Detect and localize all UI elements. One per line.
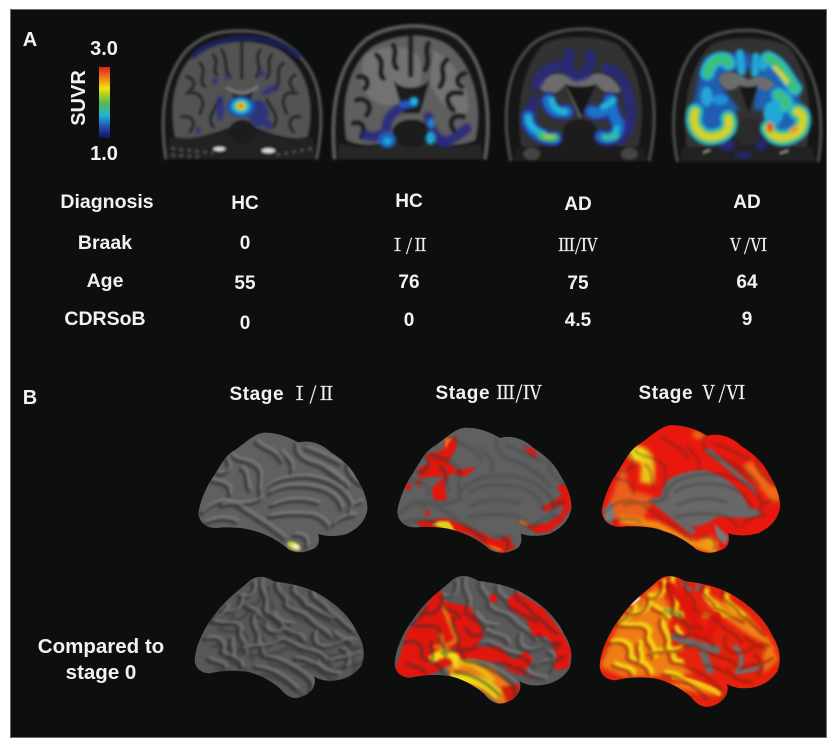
colour scale: SUVR: 1.0 [90,143,118,165]
table row labels: Diagnosis [60,191,154,213]
table column: scan 3 values: 75 [567,273,589,294]
table column: scan 1 values: 55 [234,273,256,294]
table column: scan 2 values: HC [395,191,423,212]
table column: scan 3 values [558,194,598,331]
brain: stage I/II lateral [195,577,365,702]
table column: scan 1 values: 0 [240,313,250,334]
table column: scan 1 values [231,193,259,334]
table column: scan 2 values [389,191,429,331]
PET scan 4: AD Braak V/VI [673,30,821,162]
row label: compared to stage 0 [38,635,164,684]
table row labels: CDRSoB [64,308,146,330]
row label: compared to stage 0: stage 0 [66,661,136,684]
table column: scan 2 values: 0 [404,310,414,331]
table column: scan 2 values: 76 [398,272,420,293]
table column: scan 3 values: Ⅲ/Ⅳ [558,231,598,256]
brain: stage III/IV medial [397,428,572,553]
panel label B: B [23,387,37,409]
brain: stage V/VI medial [602,425,780,553]
colour scale: SUVR: SUVR [68,70,90,126]
brain: stage V/VI lateral [600,576,780,707]
colour scale: SUVR [68,38,118,165]
stage headings: Stage Ⅴ/Ⅵ [638,378,746,405]
PET scan 1: HC Braak 0 [163,31,321,159]
stage headings [229,378,746,406]
table column: scan 4 values: 9 [742,309,752,330]
table column: scan 1 values: HC [231,193,259,214]
table column: scan 1 values: 0 [240,233,250,254]
table row labels: Age [87,270,124,292]
table column: scan 3 values: 4.5 [565,310,592,331]
PET scan 2: HC Braak I/II [333,26,488,159]
row label: compared to stage 0: Compared to [38,635,164,658]
table column: scan 4 values: 64 [736,272,758,293]
table column: scan 4 values [727,192,767,330]
stage headings: Stage Ⅰ/Ⅱ [229,379,337,406]
stage headings: Stage Ⅲ/Ⅳ [435,378,543,405]
panel label A: A [23,29,37,51]
brain: stage III/IV lateral [393,576,572,705]
table column: scan 3 values: AD [564,194,592,215]
PET scan 3: AD Braak III/IV [506,29,654,161]
table column: scan 2 values: Ⅰ/Ⅱ [389,231,429,256]
table row labels: Braak [78,232,132,254]
table column: scan 4 values: AD [733,192,761,213]
table column: scan 4 values: Ⅴ/Ⅵ [727,231,767,256]
colour scale: SUVR: 3.0 [90,38,118,60]
table row labels [60,191,154,330]
brain: stage I/II medial [198,433,367,553]
